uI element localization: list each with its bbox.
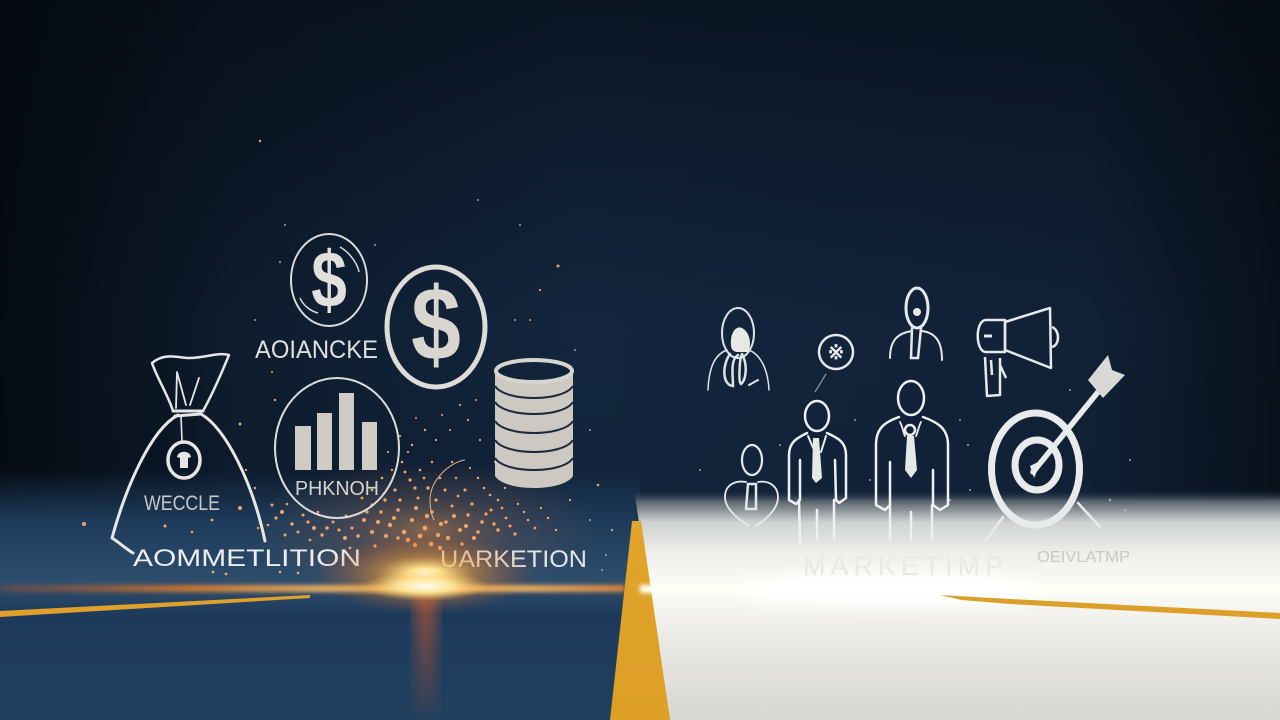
icon: small badge with line: ※ <box>828 342 844 364</box>
icon: dollar coin small <box>291 234 367 326</box>
panel: blue floor, left <box>0 470 640 720</box>
label: marketion text: UARKETION <box>440 546 587 573</box>
label: administration text: AOMMETLITION <box>133 545 361 572</box>
icon: bar chart in circle: PHKNOH <box>295 478 379 500</box>
icon: dollar coin large <box>387 266 485 387</box>
icon: money bag <box>112 354 265 553</box>
light streaks and flare <box>0 534 1280 712</box>
icon: bar chart in circle <box>275 378 399 518</box>
label: advance text: AOIANCKE <box>255 336 378 364</box>
icon: dollar coin large: $ <box>411 266 461 383</box>
icon: dollar coin small: $ <box>311 235 347 325</box>
label: bag text: WECCLE <box>144 492 220 515</box>
gold wedge divider <box>610 521 670 720</box>
sparks: orange particles <box>82 140 599 575</box>
icon: thin arc <box>430 460 465 520</box>
icon: megaphone <box>978 308 1058 396</box>
label: marketing text: MARKETIMP <box>803 551 1003 581</box>
icon: businessman tall <box>876 381 948 540</box>
icon: target with arrow <box>985 355 1125 542</box>
panel: white floor, right <box>634 490 1280 720</box>
label: campaign text: OEIVLATMP <box>1037 549 1130 566</box>
spark cloud glow <box>250 460 600 600</box>
icon: coin stack <box>495 360 573 488</box>
icon: small badge with line <box>815 335 853 392</box>
icon: small person <box>725 445 778 526</box>
sparks: pale particles <box>254 199 1131 571</box>
icon: woman figure <box>708 308 769 390</box>
icon: person top <box>890 288 942 360</box>
icon: businessman middle <box>789 401 846 542</box>
